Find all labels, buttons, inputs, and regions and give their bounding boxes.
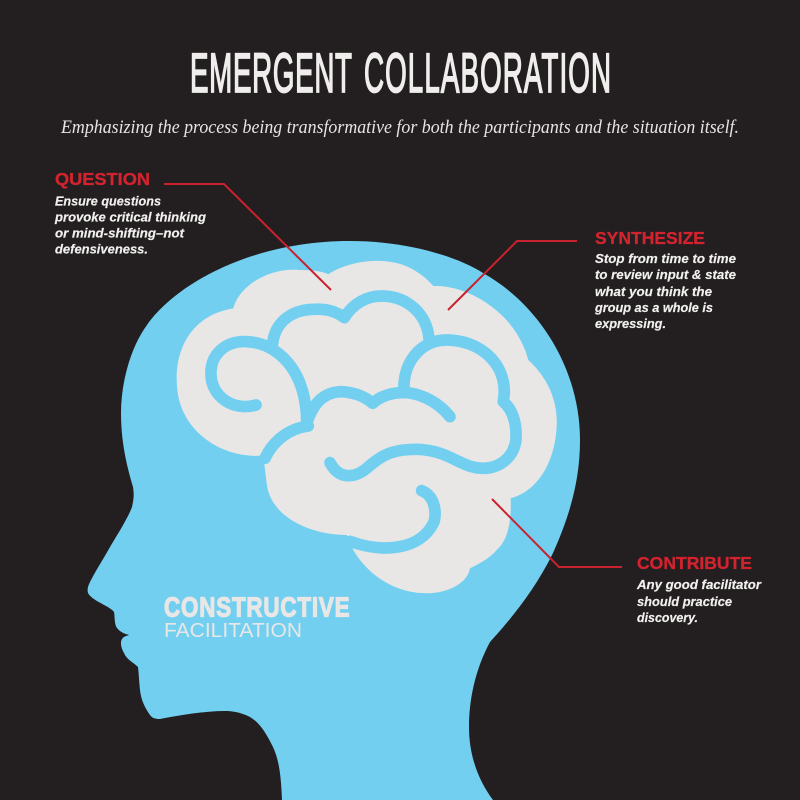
callout: contribute: Any good facilitator — [636, 577, 762, 592]
callout: synthesize: Stop from time to time — [595, 251, 736, 266]
callout: question: QUESTION — [55, 169, 150, 189]
callout: synthesize — [594, 228, 736, 331]
callout: contribute: CONTRIBUTE — [637, 553, 752, 573]
title — [190, 43, 611, 105]
leader line: contribute — [492, 499, 622, 567]
label: constructive facilitation — [164, 592, 350, 642]
brain folds — [211, 296, 516, 548]
leader line: question — [164, 184, 331, 290]
callout: question: Ensure questions — [55, 194, 161, 208]
callout: synthesize: expressing. — [595, 316, 666, 331]
callout: synthesize: SYNTHESIZE — [595, 228, 705, 248]
callout: contribute — [636, 553, 762, 625]
callout: question: or mind-shifting–not — [55, 226, 185, 240]
callout: question: provoke critical thinking — [54, 210, 206, 224]
brain — [177, 261, 557, 593]
subtitle: Emphasizing the process being transformative for both the participants and the situation itself. — [60, 117, 739, 138]
label: constructive facilitation: CONSTRUCTIVE — [164, 592, 350, 623]
brain silhouette — [177, 261, 557, 593]
callout: contribute: discovery. — [637, 610, 698, 625]
callout: contribute: should practice — [637, 594, 732, 609]
callout: synthesize: to review input & state — [595, 267, 736, 282]
callout: question — [54, 169, 206, 256]
head silhouette — [88, 241, 580, 800]
leader line: synthesize — [448, 241, 577, 310]
callout: synthesize: what you think the — [595, 284, 712, 299]
callout: question: defensiveness. — [55, 242, 148, 256]
label: constructive facilitation: FACILITATION — [164, 620, 302, 642]
title: COLLABORATION — [364, 43, 611, 105]
title: EMERGENT — [190, 43, 352, 105]
callout: synthesize: group as a whole is — [594, 300, 713, 315]
